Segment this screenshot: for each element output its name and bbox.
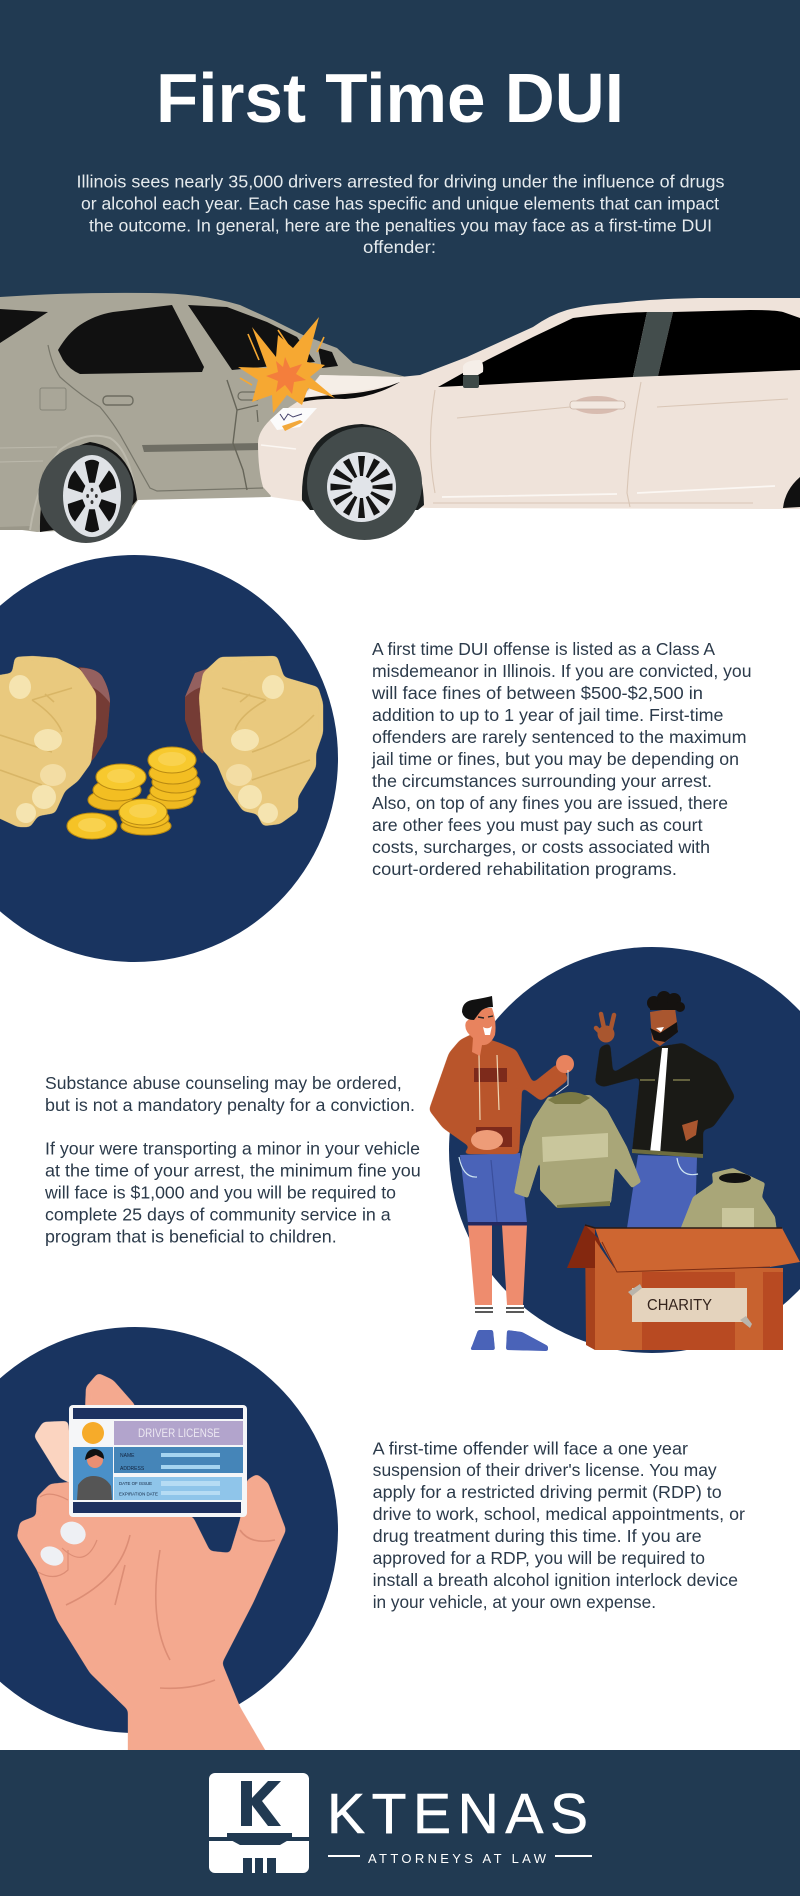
- intro text: or alcohol each year. Each case has specific and unique elements that can impact: [81, 194, 719, 214]
- section 2 text: program that is beneficial to children.: [45, 1226, 337, 1246]
- section 2 text: Substance abuse counseling may be ordered,: [45, 1073, 402, 1093]
- title: First Time DUI: [156, 59, 624, 137]
- section 2 text: complete 25 days of community service in a: [45, 1204, 391, 1224]
- section 1 text: the circumstances surrounding your arrest.: [372, 771, 712, 791]
- logo tagline: ATTORNEYS AT LAW: [368, 1851, 547, 1866]
- driver license card: [69, 1405, 247, 1517]
- section 3: circle with hand holding license: [0, 1327, 338, 1762]
- section 1 text: jail time or fines, but you may be depending on: [371, 749, 739, 769]
- driver license card: EXPIRATION DATE: [119, 1492, 158, 1496]
- hanging sweater: [514, 1070, 641, 1208]
- section 1 text: Also, on top of any fines you are issued, there: [372, 793, 728, 813]
- section 2 text: [44, 1073, 421, 1246]
- white car wheel: [302, 424, 424, 540]
- gray car wheel: [38, 445, 134, 543]
- section 1 text: addition to up to 1 year of jail time. First-time: [372, 705, 724, 725]
- section 3 text: [373, 1438, 745, 1612]
- header panel: [0, 0, 800, 440]
- gray car: [0, 293, 410, 532]
- section 3 text: A first-time offender will face a one year: [373, 1438, 688, 1458]
- footer panel: [0, 1750, 800, 1896]
- section 1 text: offenders are rarely sentenced to the maximum: [372, 727, 746, 747]
- logo wordmark: KTENAS: [327, 1782, 588, 1846]
- section 1: circle with hands and coins: [0, 555, 338, 962]
- section 1 text: A first time DUI offense is listed as a Class A: [372, 639, 715, 659]
- charity box: [567, 1225, 800, 1350]
- driver license card: DRIVER LICENSE: [138, 1426, 220, 1440]
- intro text: [76, 172, 725, 257]
- driver license card: NAME: [120, 1453, 135, 1459]
- intro text: the outcome. In general, here are the penalties you may face as a first-time DUI: [89, 216, 712, 236]
- section 2 text: but is not a mandatory penalty for a conviction.: [45, 1095, 415, 1115]
- section 3 text: drive to work, school, medical appointments, or: [373, 1504, 745, 1524]
- section 3 text: apply for a restricted driving permit (RDP) to: [373, 1482, 722, 1502]
- section 2: circle with charity donation scene: [429, 947, 800, 1353]
- driver license card: DATE OF ISSUE: [119, 1481, 152, 1486]
- man in black jacket: [595, 991, 735, 1228]
- white car: [258, 298, 800, 509]
- section 3 text: drug treatment during this time. If you are: [373, 1526, 702, 1546]
- section 3 text: approved for a RDP, you will be required to: [373, 1548, 705, 1568]
- right hand: [185, 656, 323, 826]
- explosion: [238, 317, 335, 413]
- hoodie in box: [680, 1168, 777, 1232]
- section 2 text: If your were transporting a minor in your vehicle: [45, 1138, 420, 1158]
- logo mark: [209, 1773, 309, 1873]
- section 1 text: [371, 639, 752, 879]
- charity label: CHARITY: [647, 1297, 712, 1314]
- section 3 text: install a breath alcohol ignition interlock device: [373, 1570, 738, 1590]
- section 2 text: will face is $1,000 and you will be required to: [44, 1182, 396, 1202]
- man in orange hoodie: [429, 996, 574, 1351]
- section 1 text: misdemeanor in Illinois. If you are convicted, you: [372, 661, 752, 681]
- section 1 text: are other fees you must pay such as court: [372, 815, 703, 835]
- section 1 text: will face fines of between $500-$2,500 in: [371, 683, 703, 703]
- section 3 text: suspension of their driver's license. You may: [373, 1460, 717, 1480]
- intro text: Illinois sees nearly 35,000 drivers arrested for driving under the influence of drugs: [76, 172, 725, 192]
- coins: [67, 747, 200, 839]
- section 1 text: court-ordered rehabilitation programs.: [372, 859, 677, 879]
- left hand: [0, 656, 110, 827]
- intro text: offender:: [363, 237, 436, 257]
- charity label: [628, 1284, 752, 1328]
- section 1 text: costs, surcharges, or costs associated with: [372, 837, 710, 857]
- section 2 text: at the time of your arrest, the minimum fine you: [45, 1160, 421, 1180]
- section 3 text: in your vehicle, at your own expense.: [373, 1592, 656, 1612]
- illustration: car crash: [0, 293, 800, 543]
- driver license card: ADDRESS: [120, 1466, 145, 1472]
- hand: [17, 1373, 286, 1762]
